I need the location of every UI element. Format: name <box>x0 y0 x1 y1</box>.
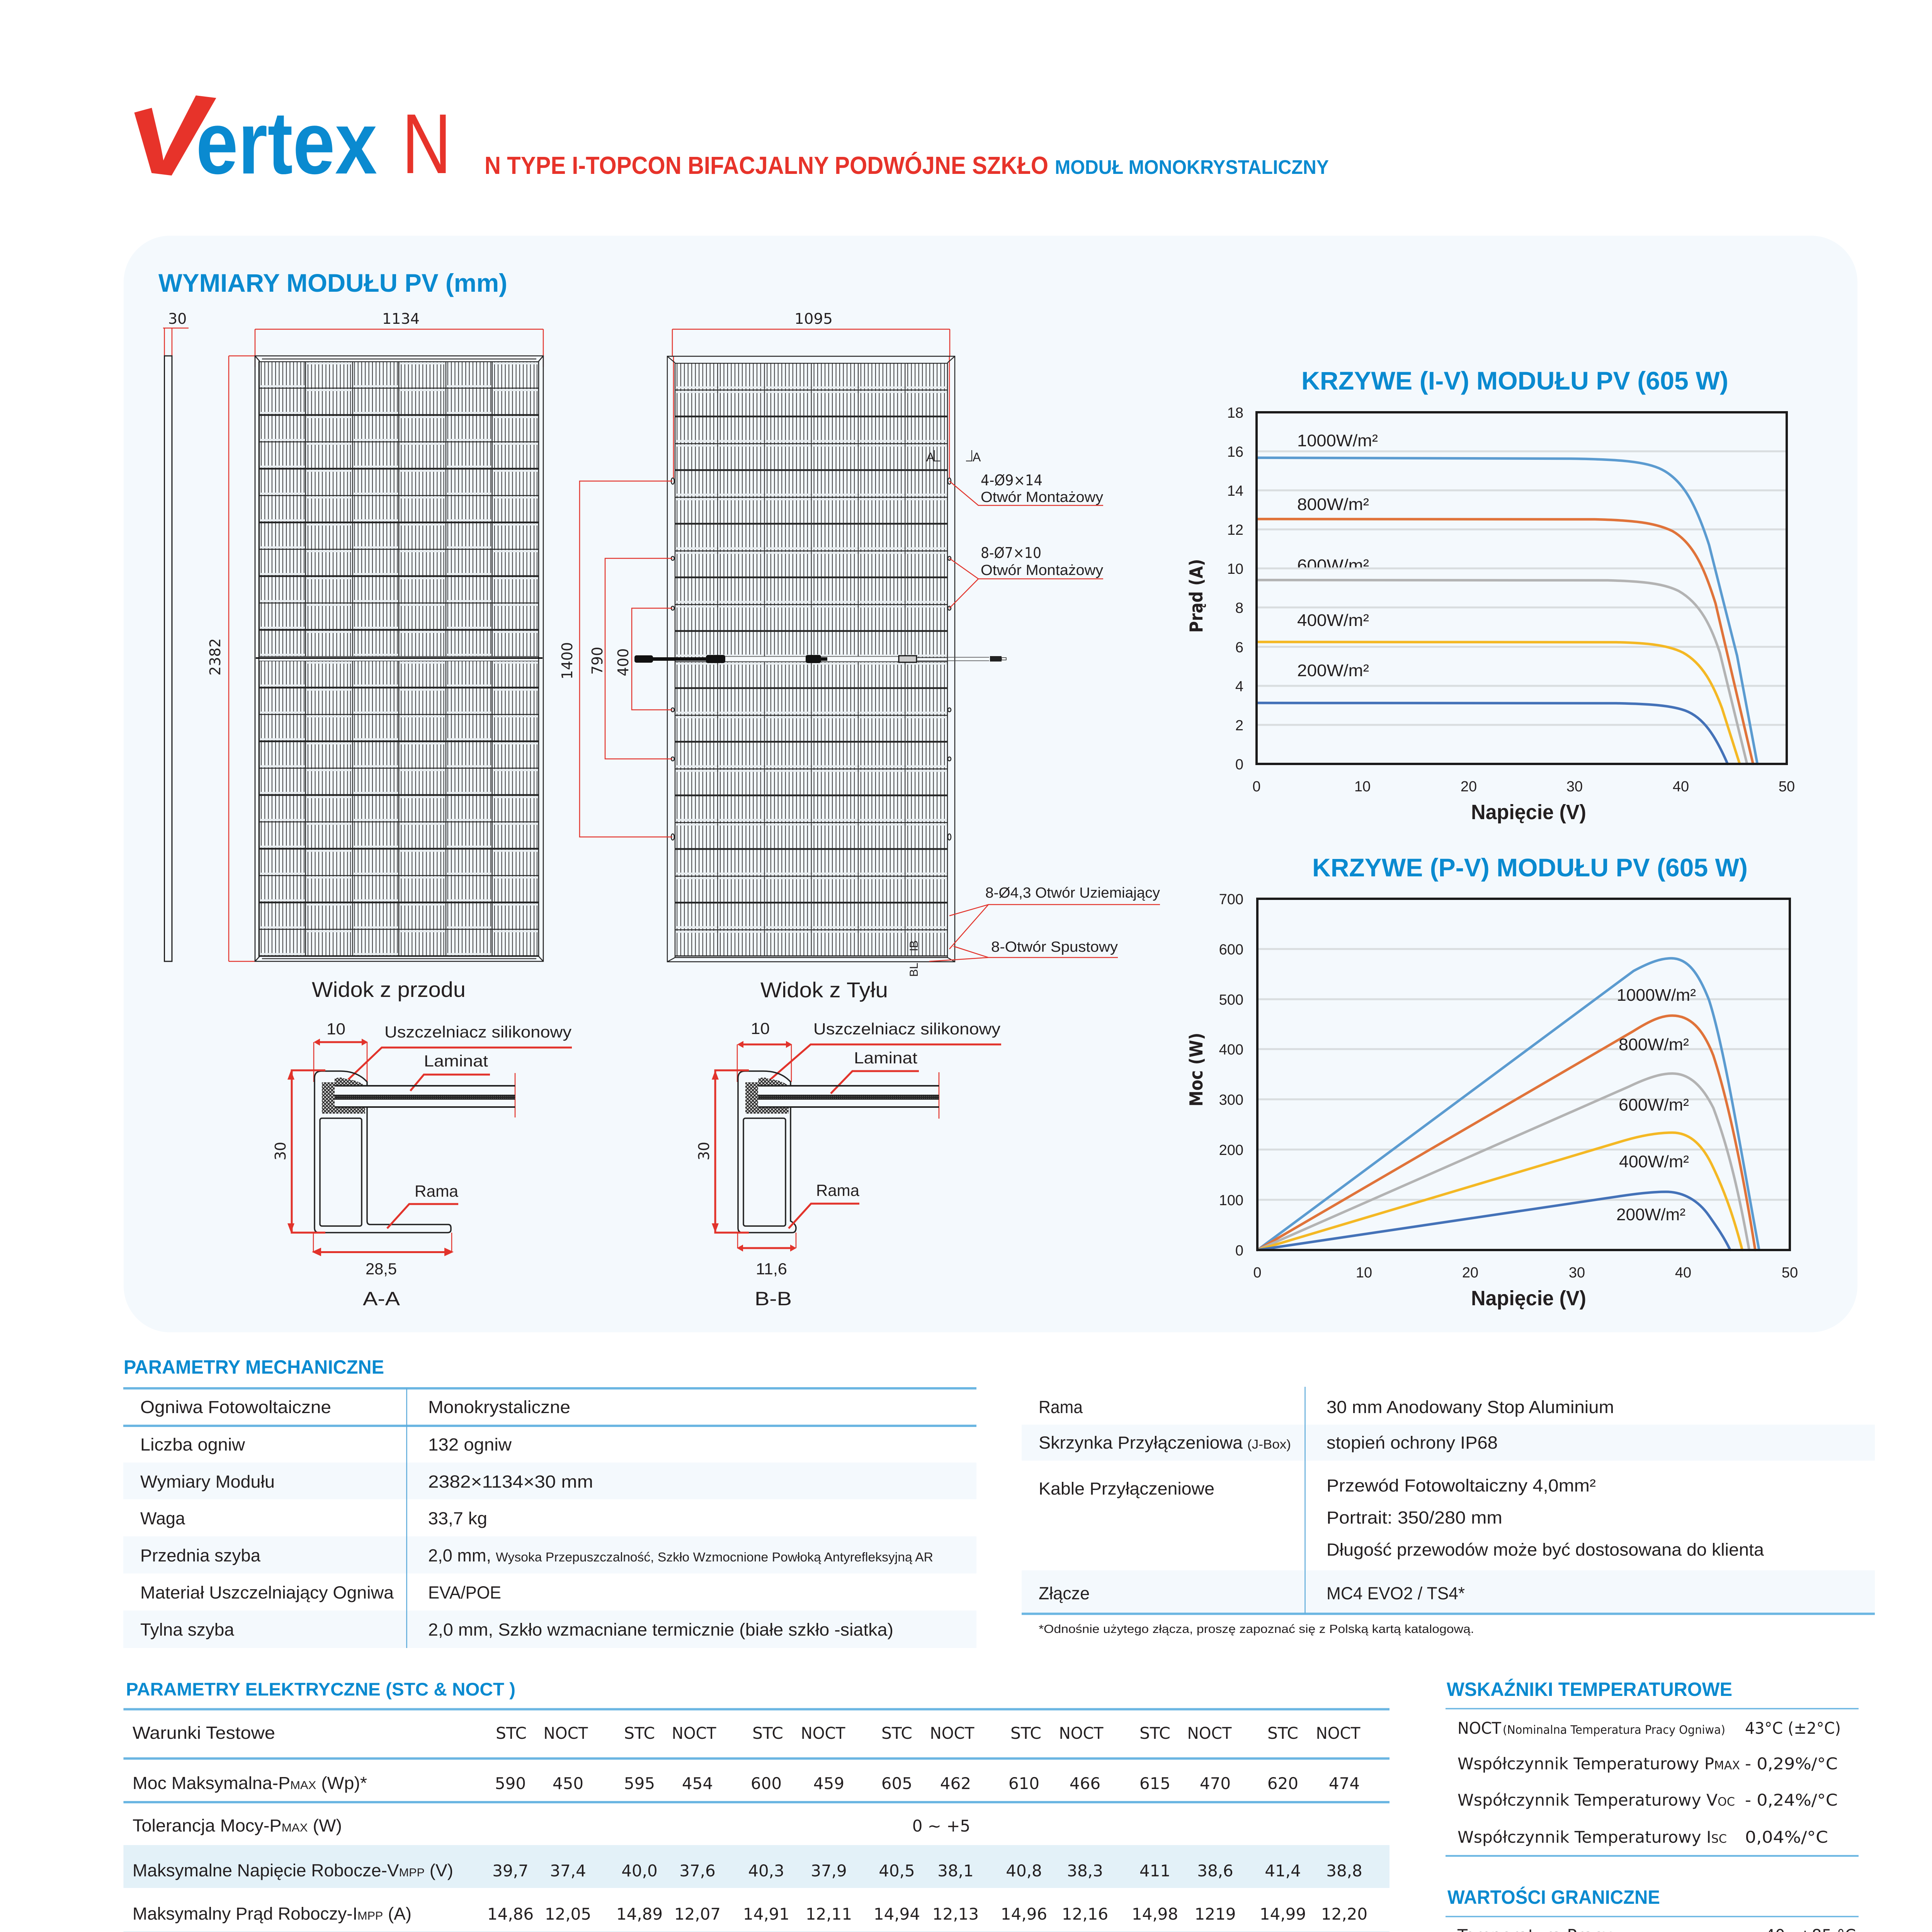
section drawing A-A: A-A <box>363 1288 400 1310</box>
row: Pmax: 620 <box>1267 1774 1298 1793</box>
section marks <box>908 450 981 977</box>
row: Pmax: 615 <box>1139 1774 1170 1793</box>
x axis ticks <box>1253 1265 1798 1281</box>
x axis ticks: 20 <box>1461 779 1477 795</box>
heading: electrical parameters: PARAMETRY ELEKTRYCZNE (STC & NOCT ) <box>126 1679 515 1699</box>
dimension lines 1400, 790, 400: 790 <box>589 647 606 675</box>
x axis ticks: 10 <box>1356 1265 1372 1281</box>
row: Vmpp: 38,8 <box>1326 1861 1362 1880</box>
table: mechanical parameters left: 2382×1134×30 mm <box>428 1472 593 1492</box>
row: Vmpp: 40,0 <box>621 1861 658 1880</box>
panel: temperature ratings: 0,04%/°C <box>1745 1828 1828 1847</box>
row: Vmpp: 40,3 <box>748 1861 784 1880</box>
row: Impp: 12,07 <box>674 1905 721 1923</box>
x axis ticks: 50 <box>1782 1265 1798 1281</box>
panel: temperature ratings: Współczynnik Temperaturowy ISC <box>1458 1828 1727 1847</box>
callout: drain holes <box>929 939 1118 961</box>
section drawing A-A: Rama <box>415 1182 459 1200</box>
row: Impp: 14,91 <box>743 1905 789 1923</box>
x axis ticks: 20 <box>1462 1265 1478 1281</box>
x axis ticks: 40 <box>1673 779 1689 795</box>
row: test conditions: NOCT <box>801 1724 845 1743</box>
y axis ticks: 700 <box>1219 891 1243 908</box>
y axis ticks: 600 <box>1219 942 1243 958</box>
row: Impp: 14,94 <box>874 1905 920 1923</box>
x axis ticks: 50 <box>1779 779 1795 795</box>
row: Vmpp: 411 <box>1139 1861 1170 1880</box>
row: test conditions: STC <box>1010 1724 1041 1743</box>
table: mechanical parameters right: (J-Box) <box>1247 1437 1291 1451</box>
row: Impp <box>487 1905 1367 1923</box>
section drawing A-A: 10 <box>327 1020 345 1038</box>
table: mechanical parameters right: Rama <box>1039 1397 1083 1417</box>
row: Pmax: 610 <box>1009 1774 1039 1793</box>
x axis ticks: 0 <box>1252 779 1261 795</box>
row labels: Tolerancja Mocy-P MAX (W) <box>133 1816 342 1835</box>
dimension lines 1400, 790, 400 <box>559 481 672 837</box>
heading: module dimensions: WYMIARY MODUŁU PV (mm) <box>158 269 507 297</box>
panel: dimensions and curves <box>124 236 1857 1332</box>
section drawing A-A: 30 <box>272 1142 289 1160</box>
table: mechanical parameters left: Materiał Uszczelniający Ogniwa <box>140 1583 394 1602</box>
table: mechanical parameters right: 30 mm Anodowany Stop Aluminium <box>1327 1397 1614 1417</box>
mounting holes <box>671 478 951 840</box>
y axis ticks: 500 <box>1219 992 1243 1008</box>
callout: grounding holes <box>949 885 1160 949</box>
row: test conditions: STC <box>1267 1724 1298 1743</box>
panel: temperature ratings: 43°C (±2°C) <box>1745 1719 1841 1738</box>
row: Pmax: 450 <box>553 1774 583 1793</box>
drawing: front view <box>207 310 543 961</box>
row: Vmpp: 40,5 <box>879 1861 915 1880</box>
series labels: 1000W/m² <box>1617 986 1696 1005</box>
table: mechanical parameters left: Przednia szyba <box>140 1546 261 1565</box>
section drawing B-B: B-B <box>755 1288 792 1310</box>
row: Vmpp: 38,3 <box>1067 1861 1103 1880</box>
drawing: side profile: 30 <box>168 310 187 327</box>
row: Pmax: 470 <box>1200 1774 1231 1793</box>
callout: mounting holes 4: 4-Ø9×14 <box>981 472 1043 489</box>
callout: mounting holes 8 <box>949 544 1103 608</box>
panel: temperature ratings: - 0,24%/°C <box>1745 1791 1838 1810</box>
product subtitle: N TYPE I-TOPCON BIFACJALNY PODWÓJNE SZKŁO <box>485 151 1048 179</box>
row: Impp: 14,99 <box>1260 1905 1306 1923</box>
series labels: 400W/m² <box>1619 1152 1689 1171</box>
series labels <box>1616 986 1696 1224</box>
row: Impp: 12,20 <box>1321 1905 1367 1923</box>
series labels: 800W/m² <box>1297 495 1369 514</box>
section marks: A <box>926 450 935 464</box>
table: mechanical parameters right: Przewód Fotowoltaiczny 4,0mm² <box>1327 1476 1596 1495</box>
row: Pmax: 462 <box>940 1774 971 1793</box>
series labels: 600W/m² <box>1297 556 1369 575</box>
row: Vmpp: 38,1 <box>937 1861 974 1880</box>
heading: mechanical parameters: PARAMETRY MECHANICZNE <box>124 1356 384 1378</box>
row: test conditions: STC <box>624 1724 655 1743</box>
row: Impp: 14,96 <box>1001 1905 1047 1923</box>
row labels: Warunki Testowe <box>133 1723 275 1743</box>
table: mechanical parameters left: Wymiary Modułu <box>140 1472 275 1492</box>
y axis ticks: 200 <box>1219 1142 1243 1158</box>
callout: grounding holes: 8-Ø4,3 Otwór Uziemiający <box>985 885 1160 901</box>
panel: temperature ratings: Współczynnik Temperaturowy VOC <box>1458 1791 1735 1810</box>
series labels: 200W/m² <box>1616 1205 1685 1224</box>
row labels: Moc Maksymalna-P MAX (Wp)* <box>133 1773 367 1793</box>
table: electrical parameters <box>124 1709 1389 1932</box>
series labels: 600W/m² <box>1619 1095 1689 1114</box>
row: Vmpp: 39,7 <box>492 1861 529 1880</box>
drawing: rear view <box>559 310 1006 977</box>
table: mechanical parameters left <box>123 1388 976 1648</box>
callout: mounting holes 8: 8-Ø7×10 <box>981 544 1041 561</box>
callout: mounting holes 4: Otwór Montażowy <box>981 489 1103 505</box>
dimension lines 1400, 790, 400: 400 <box>615 648 632 676</box>
table: mechanical parameters right: Portrait: 350/280 mm <box>1327 1508 1502 1527</box>
y axis ticks: 8 <box>1235 600 1243 616</box>
row labels <box>133 1723 453 1932</box>
y axis ticks: 12 <box>1227 522 1243 538</box>
row: Impp: 1219 <box>1195 1905 1236 1923</box>
section drawing A-A: Uszczelniacz silikonowy <box>384 1023 571 1041</box>
table: mechanical parameters right <box>1022 1387 1875 1614</box>
x axis ticks: 30 <box>1569 1265 1585 1281</box>
row: Vmpp: 40,8 <box>1006 1861 1042 1880</box>
table: mechanical parameters left: 33,7 kg <box>428 1509 487 1528</box>
curves <box>1257 958 1759 1250</box>
table: mechanical parameters left: EVA/POE <box>428 1583 501 1602</box>
panel: limit values <box>1446 1886 1859 1932</box>
heading: P-V curves: KRZYWE (P-V) MODUŁU PV (605 W) <box>1312 853 1748 882</box>
table: mechanical parameters left: 2,0 mm, <box>428 1546 491 1565</box>
table: mechanical parameters right: MC4 EVO2 / TS4* <box>1327 1583 1465 1603</box>
y axis ticks: 400 <box>1219 1042 1243 1058</box>
row: Impp: 12,05 <box>545 1905 591 1923</box>
row: Pmax: 454 <box>682 1774 713 1793</box>
drawing: front view: 2382 <box>207 638 224 675</box>
section drawing B-B: Laminat <box>854 1049 917 1067</box>
y axis ticks: 100 <box>1219 1192 1243 1209</box>
x axis ticks: 10 <box>1354 779 1371 795</box>
product subtitle: MODUŁ MONOKRYSTALICZNY <box>1055 156 1329 178</box>
x axis title: Napięcie (V) <box>1471 801 1586 824</box>
cable and connectors <box>634 655 1006 663</box>
row: Pmax: 605 <box>881 1774 912 1793</box>
table: mechanical parameters left: Ogniwa Fotowoltaiczne <box>140 1397 331 1417</box>
y axis title: Prąd (A) <box>1186 559 1207 633</box>
panel: temperature ratings: (Nominalna Temperatura Pracy Ogniwa) <box>1503 1723 1725 1737</box>
row: Impp: 12,11 <box>806 1905 852 1923</box>
row: Vmpp: 37,6 <box>679 1861 716 1880</box>
panel: temperature ratings: - 0,29%/°C <box>1745 1754 1838 1773</box>
row: Vmpp: 37,9 <box>811 1861 847 1880</box>
row: test conditions: STC <box>496 1724 527 1743</box>
section drawing B-B: 11,6 <box>756 1260 787 1278</box>
row: test conditions: NOCT <box>1059 1724 1104 1743</box>
table: mechanical parameters left: 132 ogniw <box>428 1435 512 1454</box>
caption: front view: Widok z przodu <box>312 977 466 1002</box>
section drawing B-B: 10 <box>751 1019 770 1037</box>
row: Pmax: 595 <box>624 1774 655 1793</box>
row: Impp: 14,98 <box>1132 1905 1178 1923</box>
callout: mounting holes 4 <box>949 472 1103 505</box>
section marks: A <box>973 450 981 464</box>
row: test conditions: NOCT <box>543 1724 588 1743</box>
footnote: connector: *Odnośnie użytego złącza, proszę zapoznać się z Polską kartą katalogową. <box>1039 1622 1474 1636</box>
table: mechanical parameters right: Skrzynka Przyłączeniowa <box>1039 1433 1243 1452</box>
section marks: BL <box>908 963 920 977</box>
table: mechanical parameters left: Monokrystaliczne <box>428 1397 570 1417</box>
row: test conditions: STC <box>752 1724 783 1743</box>
y axis ticks: 6 <box>1235 639 1243 656</box>
panel: temperature ratings: NOCT <box>1458 1719 1501 1738</box>
table: mechanical parameters left: Liczba ogniw <box>140 1435 245 1454</box>
logo: Vertex N <box>113 61 451 205</box>
y axis ticks: 4 <box>1235 679 1243 695</box>
series labels: 400W/m² <box>1297 611 1369 630</box>
row: Impp: 14,86 <box>487 1905 534 1923</box>
table: mechanical parameters left: Tylna szyba <box>140 1620 235 1639</box>
section drawing B-B <box>696 1019 1001 1310</box>
table: mechanical parameters left: Waga <box>140 1509 185 1528</box>
drawing: side profile <box>163 310 189 961</box>
table: mechanical parameters right: stopień ochrony IP68 <box>1327 1433 1498 1452</box>
y axis ticks: 0 <box>1235 757 1243 773</box>
row: Impp: 12,13 <box>932 1905 979 1923</box>
table: mechanical parameters right: Złącze <box>1039 1583 1090 1603</box>
y axis ticks: 16 <box>1227 444 1243 460</box>
row: Impp: 12,16 <box>1062 1905 1108 1923</box>
heading: I-V curves: KRZYWE (I-V) MODUŁU PV (605 W) <box>1301 366 1728 395</box>
chart: I-V curves <box>1186 405 1795 824</box>
row: test conditions: NOCT <box>672 1724 716 1743</box>
table: mechanical parameters right: Długość przewodów może być dostosowana do klienta <box>1327 1540 1764 1560</box>
y axis ticks: 0 <box>1235 1243 1243 1259</box>
panel: temperature ratings: Współczynnik Temperaturowy PMAX <box>1458 1754 1740 1773</box>
row: Vmpp: 37,4 <box>550 1861 586 1880</box>
logo: Vertex N: N <box>402 96 451 191</box>
panel: temperature ratings <box>1446 1679 1859 1856</box>
row: Pmax: 590 <box>495 1774 526 1793</box>
section drawing B-B: Rama <box>816 1181 860 1199</box>
callout: drain holes: 8-Otwór Spustowy <box>991 939 1118 955</box>
y axis ticks: 14 <box>1227 483 1243 499</box>
row: Vmpp <box>492 1861 1362 1880</box>
table: mechanical parameters left: 2,0 mm, Szkło wzmacniane termicznie (białe szkło -siatka) <box>428 1620 893 1639</box>
row: Pmax: 466 <box>1070 1774 1100 1793</box>
caption: rear view: Widok z Tyłu <box>760 978 888 1002</box>
panel: temperature ratings: WSKAŹNIKI TEMPERATUROWE <box>1447 1679 1732 1700</box>
y axis title: Moc (W) <box>1186 1032 1207 1107</box>
section drawing A-A: Laminat <box>424 1052 488 1070</box>
row: test conditions <box>496 1724 1361 1743</box>
row: test conditions: NOCT <box>930 1724 975 1743</box>
y axis ticks <box>1219 891 1243 1259</box>
table: mechanical parameters right: Kable Przyłączeniowe <box>1039 1479 1214 1498</box>
series labels <box>1294 431 1379 680</box>
row: Pmax: 459 <box>813 1774 844 1793</box>
drawing: front view: 1134 <box>382 310 420 327</box>
row labels: Maksymalny Prąd Roboczy-I MPP (A) <box>133 1904 412 1923</box>
section marks: IB <box>908 940 920 951</box>
dimension lines 1400, 790, 400: 1400 <box>559 642 576 679</box>
y axis ticks: 2 <box>1235 718 1243 734</box>
row: Vmpp: 41,4 <box>1265 1861 1301 1880</box>
row labels: Maksymalne Napięcie Robocze-V MPP (V) <box>133 1861 453 1880</box>
callout: mounting holes 8: Otwór Montażowy <box>981 562 1103 578</box>
section drawing A-A: 28,5 <box>366 1260 397 1278</box>
x axis ticks: 30 <box>1566 779 1583 795</box>
x axis ticks: 0 <box>1253 1265 1262 1281</box>
y axis ticks: 300 <box>1219 1092 1243 1108</box>
curves <box>1257 458 1757 764</box>
row: test conditions: STC <box>1139 1724 1170 1743</box>
section drawing B-B: Uszczelniacz silikonowy <box>813 1020 1000 1038</box>
row: Impp: 14,89 <box>616 1905 663 1923</box>
row: test conditions: NOCT <box>1316 1724 1361 1743</box>
row: Pmax: 600 <box>751 1774 782 1793</box>
x axis title: Napięcie (V) <box>1471 1287 1586 1310</box>
row: Pmax <box>495 1774 1360 1793</box>
section drawing A-A <box>272 1020 572 1310</box>
logo: Vertex N: ertex <box>196 93 377 192</box>
row: Pmax: 474 <box>1329 1774 1360 1793</box>
series labels: 1000W/m² <box>1297 431 1378 450</box>
x axis ticks: 40 <box>1675 1265 1691 1281</box>
series labels: 200W/m² <box>1297 661 1369 680</box>
row: tolerance: 0 ~ +5 <box>912 1816 970 1835</box>
logo: Vertex N: V <box>113 61 221 205</box>
series labels: 800W/m² <box>1619 1035 1689 1054</box>
y axis ticks: 10 <box>1227 561 1243 577</box>
chart: P-V curves <box>1186 891 1798 1310</box>
panel: limit values: WARTOŚCI GRANICZNE <box>1447 1886 1660 1908</box>
y axis ticks <box>1227 405 1243 773</box>
row: test conditions: STC <box>881 1724 912 1743</box>
drawing: rear view: 1095 <box>794 310 833 327</box>
y axis ticks: 18 <box>1227 405 1243 421</box>
row: Vmpp: 38,6 <box>1197 1861 1233 1880</box>
x axis ticks <box>1252 779 1795 795</box>
row: test conditions: NOCT <box>1187 1724 1232 1743</box>
section drawing B-B: 30 <box>696 1142 713 1160</box>
table: mechanical parameters left: Wysoka Przepuszczalność, Szkło Wzmocnione Powłoką Antyrefleksyjną AR <box>496 1550 933 1564</box>
